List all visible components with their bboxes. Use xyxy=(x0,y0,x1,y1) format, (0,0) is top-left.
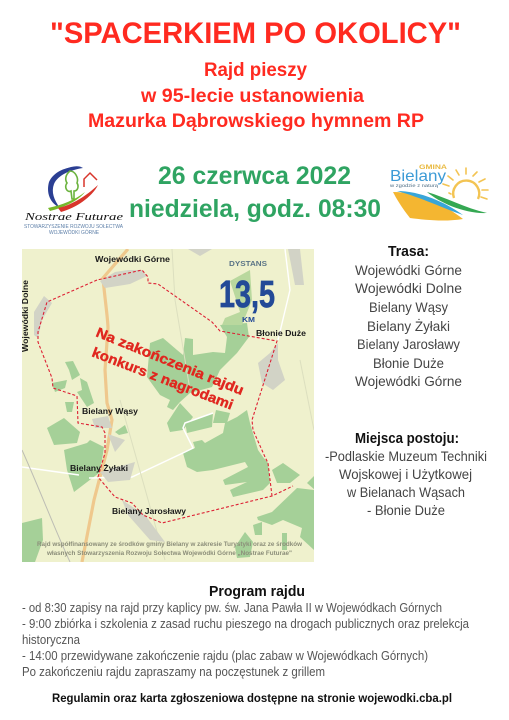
place labels xyxy=(20,254,306,516)
map panel xyxy=(20,249,315,562)
forests xyxy=(22,270,315,562)
event date: 26 czerwca 2022 xyxy=(158,162,351,190)
subtitle xyxy=(88,60,424,132)
place labels: Wojewódki Dolne xyxy=(20,280,30,352)
distance callout: 13,5 xyxy=(219,274,275,316)
place labels: Bielany Wąsy xyxy=(82,406,138,416)
route list: Bielany Żyłaki xyxy=(367,317,450,334)
logo: Gmina Bielany: Bielany xyxy=(390,168,446,185)
route list: Błonie Duże xyxy=(373,355,444,371)
logo: Nostrae Futurae xyxy=(24,166,123,236)
rest stops: w Bielanach Wąsach xyxy=(346,484,465,500)
program: - od 8:30 zapisy na rajd przy kaplicy pw. św. Jana Pawła II w Wojewódkach Górnych xyxy=(22,601,442,615)
event date: niedziela, godz. 08:30 xyxy=(129,195,381,223)
funding note: własnych Stowarzyszenia Rozwoju Sołectwa Wojewódki Górne „Nostrae Futurae" xyxy=(46,550,292,557)
prize callout xyxy=(90,324,246,413)
program: - 14:00 przewidywane zakończenie rajdu (plac zabaw w Wojewódkach Górnych) xyxy=(22,649,428,663)
place labels: Bielany Jarosławy xyxy=(112,506,186,516)
logo name: Nostrae Futurae xyxy=(24,211,123,223)
logo: Gmina Bielany: w zgodzie z naturą xyxy=(390,183,439,188)
route list: Wojewódki Górne xyxy=(355,373,462,389)
program xyxy=(22,584,469,679)
route list: Wojewódki Dolne xyxy=(355,280,462,296)
title: "SPACERKIEM PO OKOLICY" xyxy=(50,17,461,50)
place labels: Bielany Żyłaki xyxy=(70,463,128,473)
route list: Bielany Jarosławy xyxy=(357,336,460,352)
prize callout: Na zakończenia rajdu xyxy=(94,324,246,398)
route list xyxy=(355,244,462,389)
route list: Wojewódki Górne xyxy=(355,262,462,278)
prize callout: konkurs z nagrodami xyxy=(90,344,236,413)
roads xyxy=(22,249,314,562)
rest stops: -Podlaskie Muzeum Techniki xyxy=(325,448,487,464)
funding note: Rajd współfinansowany ze środków gminy Bielany w zakresie Turystyki oraz ze środków xyxy=(37,541,302,548)
route xyxy=(38,270,293,523)
rest stops heading: Miejsca postoju: xyxy=(355,431,459,447)
route list: Bielany Wąsy xyxy=(369,299,448,315)
route heading: Trasa: xyxy=(388,244,429,260)
place labels: Wojewódki Górne xyxy=(95,254,170,264)
logo subtitle xyxy=(24,224,123,236)
logo: Gmina Bielany xyxy=(390,164,488,221)
program: historyczna xyxy=(22,633,80,647)
rest stops xyxy=(325,431,487,518)
program: - 9:00 zbiórka i szkolenia z zasad ruchu pieszego na drogach publicznych oraz prelekcja xyxy=(22,617,469,631)
funding note xyxy=(37,541,302,557)
distance callout: KM xyxy=(242,317,255,324)
footer note: Regulamin oraz karta zgłoszeniowa dostępne na stronie wojewodki.cba.pl xyxy=(52,691,452,705)
subtitle: Mazurka Dąbrowskiego hymnem RP xyxy=(88,111,424,132)
rest stops: - Błonie Duże xyxy=(367,502,445,518)
logo subtitle: WOJEWÓDKI GÓRNE xyxy=(49,229,100,236)
subtitle: Rajd pieszy xyxy=(204,60,307,81)
program heading: Program rajdu xyxy=(209,584,305,600)
villages xyxy=(34,249,304,542)
distance callout xyxy=(219,261,275,324)
place labels: Błonie Duże xyxy=(256,328,306,338)
logo subtitle: STOWARZYSZENIE ROZWOJU SOŁECTWA xyxy=(24,224,123,230)
rest stops: Wojskowej i Użytkowej xyxy=(339,466,472,482)
subtitle: w 95-lecie ustanowienia xyxy=(140,86,364,107)
distance callout: DYSTANS xyxy=(229,261,267,268)
logo: Gmina Bielany: GMINA xyxy=(419,164,447,171)
program: Po zakończeniu rajdu zapraszamy na poczęstunek z grillem xyxy=(22,665,325,679)
event date xyxy=(129,162,381,223)
